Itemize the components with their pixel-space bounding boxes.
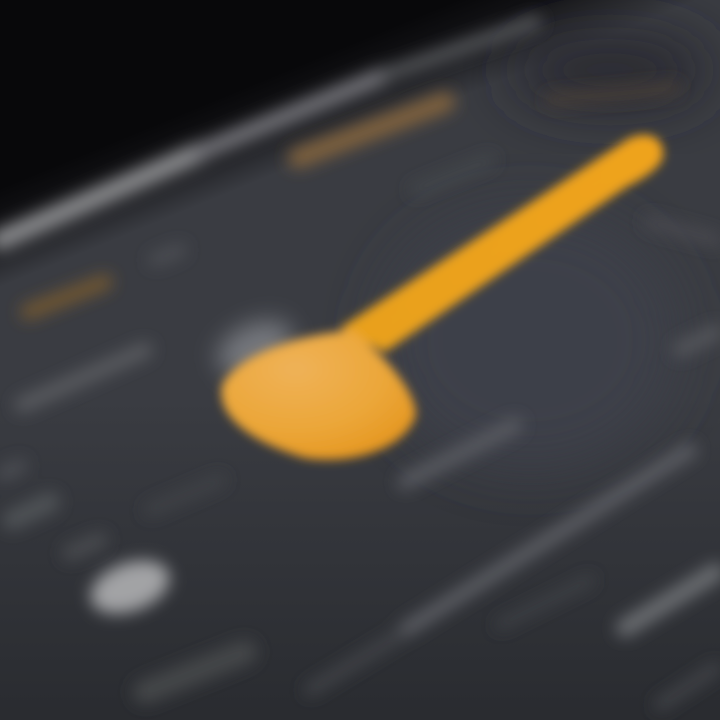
gauge needle and hub bbox=[221, 135, 663, 460]
gauge hub shadow highlight bbox=[209, 309, 301, 387]
orange bars, dim bbox=[28, 88, 675, 312]
grey label streaks bbox=[3, 160, 716, 705]
top edge highlight bbox=[0, 22, 535, 240]
bright pill bbox=[83, 550, 177, 624]
